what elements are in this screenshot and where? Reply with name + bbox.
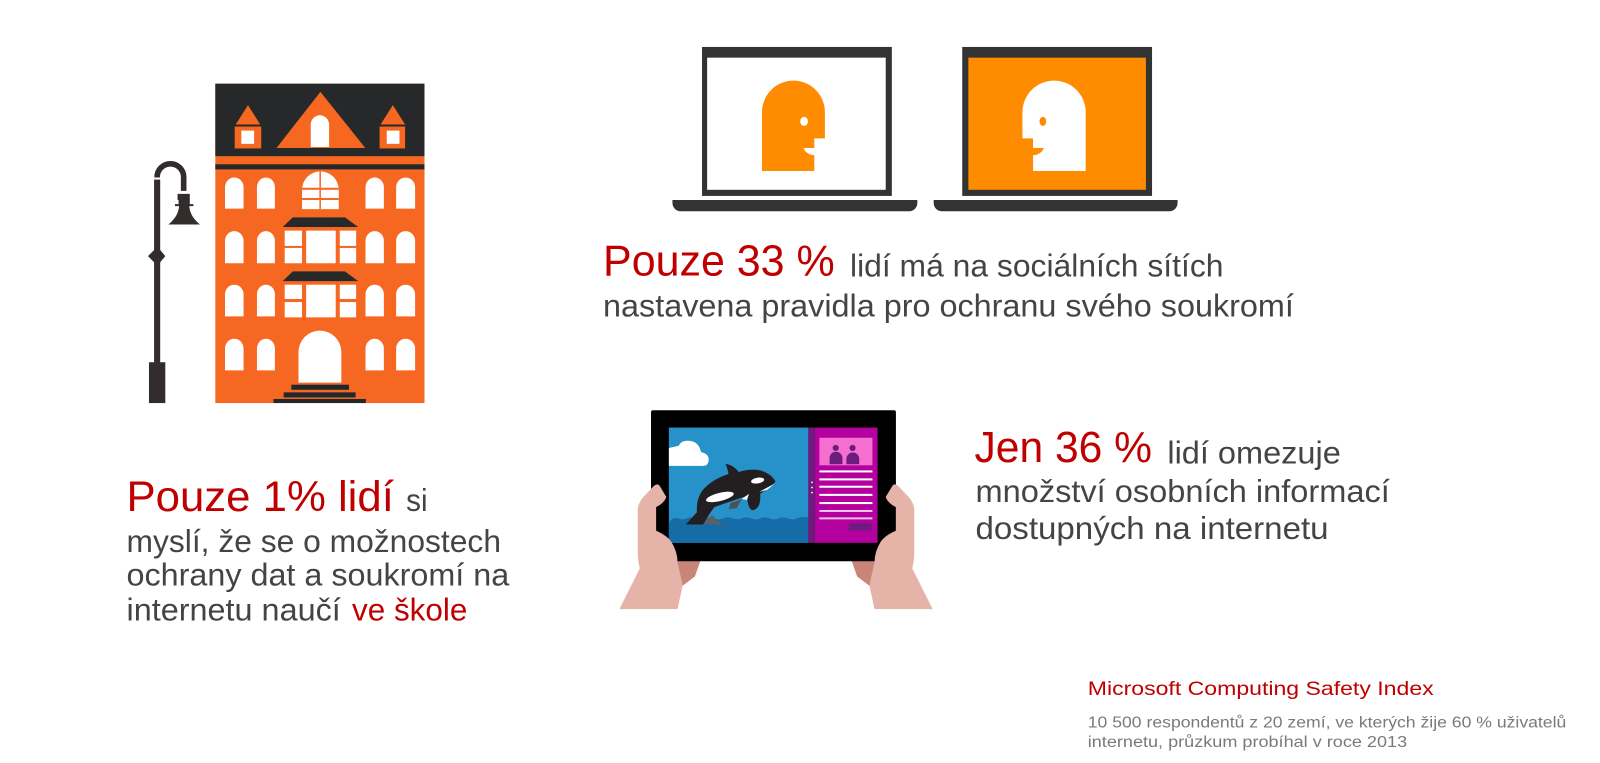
text: 33 percent statistic: Pouze 33 % (603, 237, 835, 286)
text: 1 percent statistic: ve škole (352, 591, 467, 627)
roof (215, 84, 424, 156)
text: 33 percent statistic: nastavena pravidla pro ochranu svého soukromí (603, 287, 1294, 323)
text: 36 percent statistic: dostupných na internetu (976, 510, 1329, 546)
icon: laptop with orange profile on white screen (672, 47, 917, 211)
text: 36 percent statistic: množství osobních informací (976, 473, 1390, 509)
text: 33 percent statistic (603, 237, 1294, 323)
text: 36 percent statistic: Jen 36 % (974, 423, 1152, 472)
source note: 10 500 respondentů z 20 zemí, ve kterých žije 60 % uživatelů (1088, 714, 1566, 732)
text: 33 percent statistic: lidí má na sociálních sítích (850, 248, 1223, 284)
right hand (869, 484, 933, 609)
arched windows (225, 178, 415, 370)
text: 1 percent statistic: ochrany dat a soukromí na (127, 557, 510, 593)
icon: hands holding tablet (619, 410, 933, 609)
profile head (762, 81, 825, 171)
profile head white (1022, 81, 1086, 171)
icon: street lamp (148, 164, 200, 403)
text: 1 percent statistic: si (406, 482, 428, 518)
cloud (669, 441, 709, 466)
roof dormers (235, 92, 405, 148)
dormer windows (241, 115, 399, 147)
bay windows (285, 231, 356, 317)
text: 1 percent statistic: Pouze 1% lidí (127, 473, 394, 521)
fan window (302, 170, 339, 209)
steps (273, 385, 366, 403)
text: 1 percent statistic: myslí, že se o možnostech (127, 523, 501, 559)
source note: internetu, průzkum probíhal v roce 2013 (1088, 733, 1407, 751)
icon: townhouse (215, 84, 424, 403)
tablet body (651, 410, 896, 561)
icon: laptop with white profile on orange screen (934, 47, 1178, 211)
palms behind tablet (673, 556, 879, 586)
tablet screen scene (669, 428, 809, 543)
text: 36 percent statistic: lidí omezuje (1167, 434, 1341, 470)
side panel (808, 428, 878, 543)
orca (686, 464, 776, 527)
source note (1088, 678, 1566, 751)
source note: Microsoft Computing Safety Index (1088, 678, 1434, 700)
text: 1 percent statistic: internetu naučí (127, 591, 341, 627)
text: 36 percent statistic (974, 423, 1390, 546)
text: 1 percent statistic (127, 473, 510, 627)
left hand (619, 484, 683, 609)
door (298, 331, 341, 383)
awnings (283, 217, 358, 281)
